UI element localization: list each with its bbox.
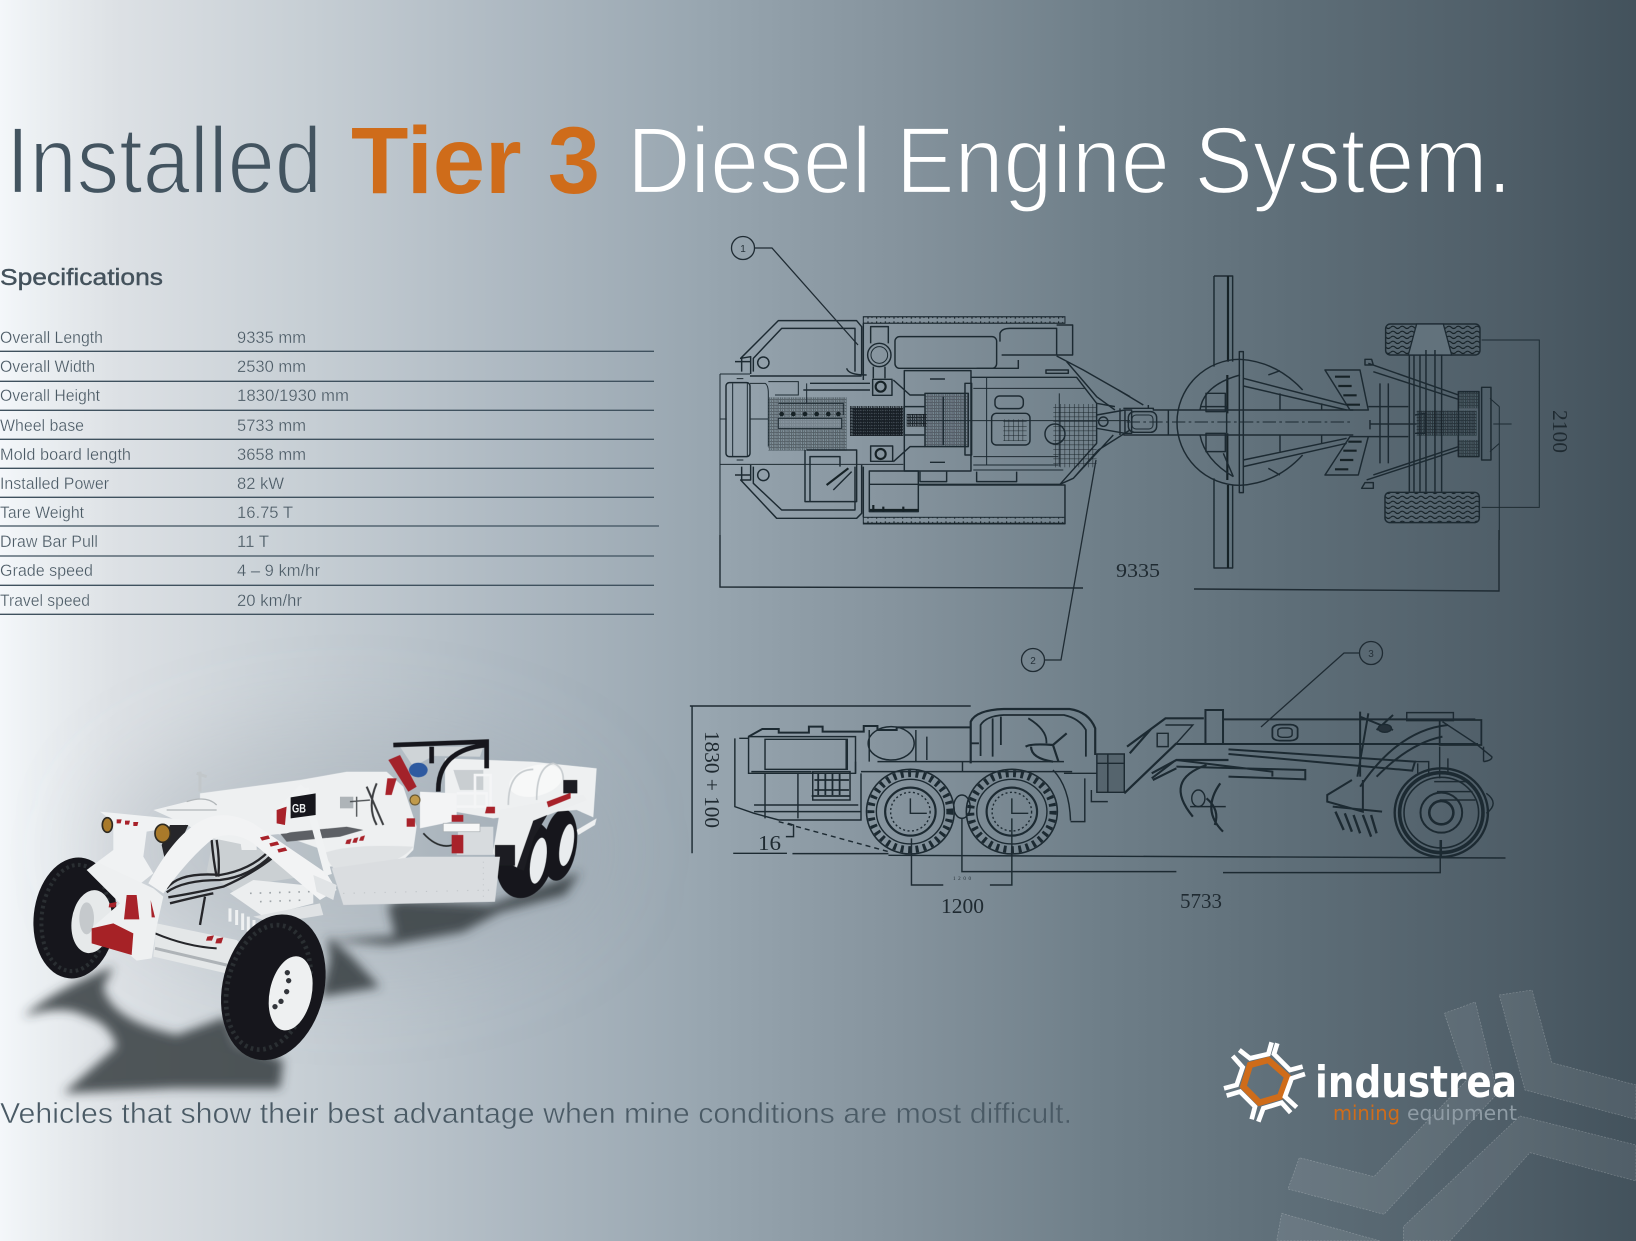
soft backdrop behind vehicle bbox=[100, 730, 600, 970]
shadow under vehicle bbox=[23, 872, 580, 1093]
fire extinguisher bbox=[388, 755, 417, 792]
arch bbox=[148, 815, 337, 900]
specifications table: 4 – 9 km/hr bbox=[237, 562, 320, 580]
perforated plate bbox=[230, 880, 313, 917]
diagram: top view, front axle and blade bbox=[1118, 276, 1539, 568]
specifications table: 5733 mm bbox=[237, 417, 306, 435]
red reflectors front bbox=[109, 807, 287, 943]
specifications table: Travel speed bbox=[0, 592, 90, 610]
callout 2: 2 bbox=[1030, 656, 1036, 667]
title: Diesel Engine System. bbox=[627, 108, 1512, 214]
title bbox=[6, 108, 1512, 214]
ripper teeth bbox=[230, 908, 254, 935]
lower arms bbox=[153, 923, 244, 975]
specifications table: Wheel base bbox=[0, 417, 84, 435]
yellow cab light bbox=[410, 795, 420, 805]
specifications table: 11 T bbox=[237, 533, 269, 551]
specifications table: 9335 mm bbox=[237, 329, 306, 347]
front frame bbox=[87, 812, 187, 887]
specifications table: Overall Length bbox=[0, 329, 103, 347]
dimension: 9335: 9335 bbox=[1116, 560, 1160, 582]
specifications table: 1830/1930 mm bbox=[237, 387, 349, 405]
logo: industrea mining equipment bbox=[1224, 1042, 1517, 1125]
wordmark: industrea bbox=[1315, 1057, 1517, 1108]
GB badge text: GB bbox=[292, 802, 306, 816]
callout 1 bbox=[732, 236, 858, 345]
blue beacon bbox=[409, 763, 428, 777]
dimension: 16 degrees: 16 bbox=[758, 831, 781, 855]
sub-brand: mining: mining bbox=[1333, 1101, 1400, 1125]
circle plate bbox=[323, 846, 413, 868]
vehicle rear section bbox=[200, 742, 597, 905]
front right tire bbox=[206, 903, 340, 1071]
callout 3 bbox=[1261, 642, 1382, 727]
left front tire bbox=[28, 853, 122, 983]
centre block and rails bbox=[420, 792, 457, 828]
specifications table: 3658 mm bbox=[237, 446, 306, 464]
specifications table: Installed Power bbox=[0, 475, 109, 493]
sub-brand: equipment: equipment bbox=[1407, 1101, 1517, 1125]
specifications table: Mold board length bbox=[0, 446, 131, 464]
rear tires bbox=[488, 807, 581, 904]
specifications table: Grade speed bbox=[0, 562, 93, 580]
headlights bbox=[102, 818, 170, 842]
title: Tier 3 bbox=[351, 108, 600, 214]
decorative chevron watermark bbox=[1277, 990, 1636, 1241]
callout 2 bbox=[1022, 460, 1096, 672]
blade bbox=[332, 857, 500, 905]
vehicle photograph bbox=[23, 730, 600, 1093]
specifications table bbox=[0, 329, 659, 614]
tagline: Vehicles that show their best advantage when mine conditions are most difficult. bbox=[0, 1098, 1072, 1130]
rear deck bbox=[445, 758, 597, 818]
small drawing label: 1200 bbox=[953, 877, 972, 882]
rear light block bbox=[92, 923, 133, 955]
diagram: side view bbox=[690, 706, 1505, 885]
logo mark bbox=[1224, 1042, 1305, 1122]
heading: specifications: Specifications bbox=[0, 264, 163, 290]
fender bbox=[493, 795, 587, 869]
specifications table: Overall Width bbox=[0, 358, 95, 376]
callout 1: 1 bbox=[740, 244, 746, 255]
specifications table: 20 km/hr bbox=[237, 592, 303, 610]
specifications table: 16.75 T bbox=[237, 504, 293, 522]
dimension: 1200: 1200 bbox=[941, 894, 984, 918]
struts bbox=[273, 787, 328, 875]
red reflectors rear bbox=[345, 778, 495, 853]
cab mesh and roll cage bbox=[400, 747, 483, 767]
specifications table: Draw Bar Pull bbox=[0, 533, 98, 551]
hoses bbox=[167, 840, 274, 925]
under-arch interior bbox=[207, 838, 313, 892]
callout 3: 3 bbox=[1368, 649, 1374, 660]
dimension: 5733: 5733 bbox=[1180, 889, 1222, 913]
vehicle front section bbox=[28, 772, 340, 1071]
fuel tank bbox=[506, 759, 566, 802]
specifications table: 82 kW bbox=[237, 475, 284, 493]
dimension: 1830 + 100: 1830 + 100 bbox=[700, 731, 724, 828]
title: Installed bbox=[6, 108, 322, 214]
dimension: 2100: 2100 bbox=[1548, 410, 1572, 453]
dimension lines: top view bbox=[720, 530, 1499, 591]
specifications table: Tare Weight bbox=[0, 504, 84, 522]
specifications table: 2530 mm bbox=[237, 358, 306, 376]
upper body behind arch bbox=[153, 780, 340, 850]
diagram: top view, rear chassis bbox=[720, 317, 1132, 540]
GB badge bbox=[291, 793, 316, 818]
specifications table: Overall Height bbox=[0, 387, 100, 405]
main body bbox=[200, 772, 417, 867]
